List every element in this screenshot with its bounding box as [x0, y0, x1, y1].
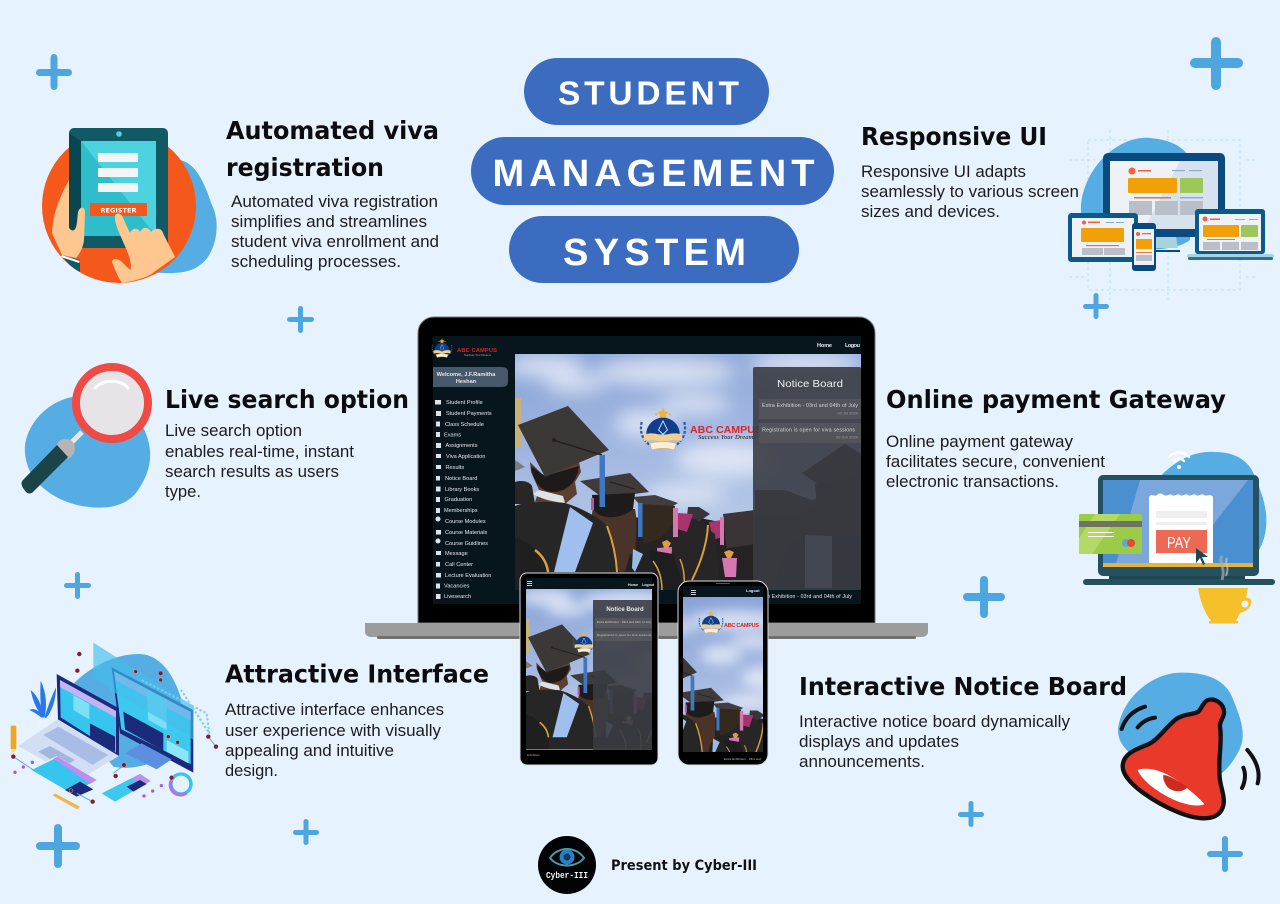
sidebar menu: Memberships [444, 508, 478, 514]
icon: online payment laptop [1079, 452, 1275, 624]
feature text: live search option: search results as users [165, 462, 339, 481]
title: Student Management System: SYSTEM [563, 232, 746, 274]
sidebar menu: Assignments [446, 443, 478, 449]
feature text: responsive UI: sizes and devices. [861, 202, 1000, 221]
feature text: automated viva registration: Automated viva registration [231, 192, 438, 211]
icon: tablet register: REGISTER [100, 206, 136, 214]
top navigation: Logou [845, 343, 861, 349]
feature text: automated viva registration: Automated viva [226, 116, 439, 145]
sidebar menu: Results [446, 465, 464, 471]
sidebar menu [432, 336, 515, 604]
tablet mockup [520, 572, 658, 766]
feature text: live search option: type. [165, 482, 201, 501]
sidebar menu: Viva Application [446, 454, 485, 460]
feature text: online payment gateway: facilitates secure, convenient [886, 452, 1105, 471]
tablet mockup: Registration is open for viva sessions [597, 633, 652, 637]
tablet mockup: Notice Board [606, 607, 644, 613]
footer: present by Cyber-III [538, 836, 757, 894]
tablet mockup: Logout [642, 583, 655, 587]
feature text: live search option [165, 385, 409, 501]
icon: magnifying glass [22, 367, 150, 508]
notice board panel: 03 Jul 2024 [837, 410, 859, 416]
sidebar menu: Message [445, 551, 468, 557]
feature text: responsive UI: Responsive UI [861, 122, 1047, 151]
tablet mockup: Exhibition [527, 753, 540, 757]
laptop mockup [365, 317, 928, 639]
feature text: live search option: Live search option [165, 421, 302, 440]
sidebar menu: Vacancies [444, 584, 470, 590]
tablet mockup: Home [628, 583, 638, 587]
sidebar menu: ABC CAMPUS [457, 348, 497, 354]
top navigation: Home [817, 343, 832, 349]
sidebar menu: Exams [444, 432, 461, 438]
feature text: interactive notice board: Interactive notice board dynamically [799, 712, 1071, 731]
feature text: live search option: Live search option [165, 385, 409, 414]
sidebar menu: Course Guidlines [445, 541, 488, 547]
sidebar menu: Call Center [445, 562, 473, 568]
sidebar menu: Graduation [444, 497, 472, 503]
feature text: automated viva registration: simplifies and streamlines [231, 212, 427, 231]
notice board panel [753, 367, 861, 590]
feature text: interactive notice board [799, 672, 1127, 771]
sidebar menu: Course Modules [445, 519, 486, 525]
feature text: interactive notice board: Interactive Notice Board [799, 672, 1127, 701]
sidebar menu: Student Payments [446, 411, 492, 417]
title: Student Management System: MANAGEMENT [492, 153, 814, 195]
feature text: attractive interface: Attractive Interface [225, 660, 489, 688]
central campus logo: Success Your Dreams [698, 434, 756, 441]
feature text: responsive UI [861, 122, 1079, 221]
Cyber-III logo: Cyber-III [546, 870, 588, 881]
tablet mockup: Extra Exhibition - 03rd and 04th of July [597, 620, 652, 624]
sidebar menu: Lecture Evaluation [445, 573, 491, 579]
feature text: attractive interface: design. [225, 761, 278, 780]
notice board panel: 29 Jun 2024 [836, 434, 859, 440]
icon: online payment laptop: PAY [1167, 535, 1191, 552]
feature text: online payment gateway [886, 385, 1226, 491]
feature text: attractive interface: user experience with visually [225, 721, 442, 740]
sidebar menu: Welcome, J.F.Ramitha [437, 372, 496, 378]
feature text: online payment gateway: Online payment gateway [886, 432, 1074, 451]
icon: isometric interface screens [11, 643, 218, 809]
feature text: attractive interface: appealing and intuitive [225, 741, 394, 760]
feature text: automated viva registration [226, 116, 439, 271]
sidebar menu: Library Books [445, 487, 479, 493]
feature text: live search option: enables real-time, instant [165, 442, 354, 461]
central campus logo [641, 407, 762, 450]
sidebar menu: Course Materials [445, 530, 487, 536]
laptop screen: campus portal home [432, 338, 861, 599]
feature text: online payment gateway: electronic transactions. [886, 472, 1059, 491]
sidebar menu: Success Your Dreams [464, 353, 492, 357]
icon: ringing notification bell [1118, 673, 1259, 818]
footer: present by Cyber-III: Present by Cyber-III [611, 858, 757, 874]
feature text: online payment gateway: Online payment Gateway [886, 385, 1226, 414]
icon: tablet register [42, 128, 217, 283]
phone mockup: Logout [746, 588, 760, 593]
feature text: responsive UI: seamlessly to various screen [861, 182, 1079, 201]
phone mockup: Extra Exhibition - 03rd and [724, 757, 761, 761]
sidebar menu: Class Schedule [445, 422, 484, 428]
Cyber-III logo [538, 836, 596, 894]
notice board panel: Notice Board [777, 378, 843, 390]
icon: responsive devices [1068, 130, 1274, 300]
title: Student Management System [471, 58, 834, 283]
notice ticker: o Exhibition - 03rd and 04th of July [767, 594, 852, 600]
feature text: interactive notice board: displays and updates [799, 732, 959, 751]
title: Student Management System: STUDENT [558, 76, 740, 112]
sidebar menu: Livesearch [444, 594, 471, 600]
central campus logo: ABC CAMPUS [690, 425, 762, 436]
feature text: automated viva registration: student viva enrollment and [231, 232, 439, 251]
top navigation [817, 343, 861, 349]
feature text: attractive interface: Attractive interface enhances [225, 700, 444, 719]
laptop base [365, 623, 928, 637]
phone mockup: ABC CAMPUS [724, 623, 759, 629]
notice board panel: Extra Exhibition - 03rd and 04th of July [762, 403, 858, 409]
notice board panel: Registration is open for viva sessions [762, 428, 855, 434]
feature text: interactive notice board: announcements. [799, 752, 925, 771]
feature text: automated viva registration: scheduling processes. [231, 252, 401, 271]
feature text: responsive UI: Responsive UI adapts [861, 162, 1026, 181]
sidebar menu: Heshan [456, 379, 477, 385]
sidebar menu: Notice Board [445, 476, 477, 482]
phone mockup [678, 580, 768, 766]
sidebar menu: Student Profile [446, 400, 483, 406]
feature text: automated viva registration: registration [226, 153, 384, 182]
feature text: attractive interface [225, 660, 489, 780]
